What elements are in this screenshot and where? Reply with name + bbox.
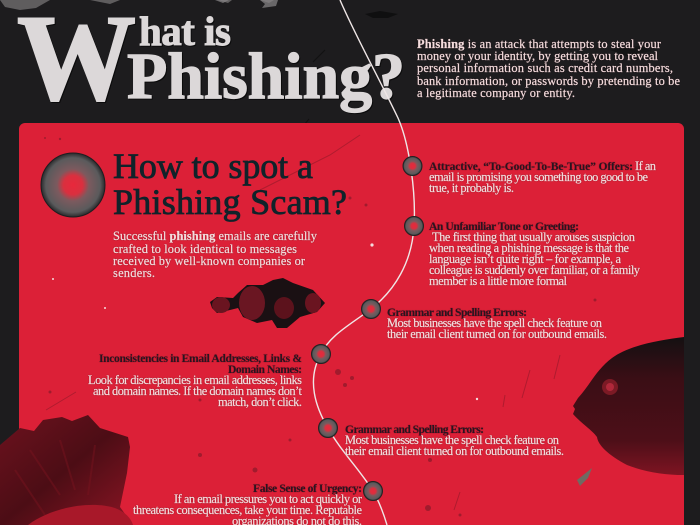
subheading paragraph: crafted to look identical to messages (113, 242, 297, 256)
item: inconsistencies: Look for discrepancies in email addresses, links (88, 373, 302, 387)
illustration: right fish (573, 337, 684, 475)
illustration: clownfish (210, 278, 325, 328)
item: attractive offers: true, it probably is. (429, 181, 514, 195)
item: unfamiliar tone: colleague is suddenly over familiar, or a family (429, 263, 641, 277)
item: false urgency (133, 482, 363, 525)
item: false urgency: False Sense of Urgency: (253, 482, 362, 495)
node 2 (404, 216, 424, 236)
item: grammar and spelling repeat: Grammar and Spelling Errors: (345, 423, 484, 436)
subheading paragraph: Successful phishing emails are carefully (113, 229, 318, 243)
item: unfamiliar tone: An Unfamiliar Tone or Greeting: (429, 220, 579, 233)
item: inconsistencies: Domain Names: (228, 363, 302, 376)
node 6 (364, 482, 382, 500)
node 3 (362, 300, 380, 318)
item: false urgency: If an email pressures you to act quickly or (174, 492, 363, 506)
item: grammar and spelling repeat: their email client turned on for outbound emails. (345, 444, 564, 458)
item: attractive offers: email is promising you something too good to be (429, 170, 648, 184)
heading: How to spot a Phishing Scam? (113, 146, 347, 222)
item: unfamiliar tone (429, 220, 641, 288)
item: attractive offers (429, 159, 656, 195)
item: inconsistencies (88, 352, 303, 409)
item: grammar and spelling: their email client turned on for outbound emails. (387, 327, 607, 341)
item: grammar and spelling (387, 306, 607, 341)
subheading paragraph: received by well-known companies or (113, 254, 306, 268)
node 1 (403, 156, 422, 176)
title: What is Phishing?: Phishing? (127, 40, 405, 113)
node 4 (312, 344, 330, 364)
illustration: left red fish fin (0, 415, 133, 525)
item: unfamiliar tone: The first thing that usually arouses suspicion (432, 230, 635, 244)
panel grunge specks (44, 135, 596, 516)
item: inconsistencies: and domain names. If the domain names don’t (93, 384, 303, 398)
heading icon: target circle (41, 153, 105, 217)
heading: How to spot a Phishing Scam?: How to spot a (113, 146, 313, 186)
intro paragraph: a legitimate company or entity. (417, 86, 575, 100)
subheading paragraph (113, 229, 318, 280)
item: grammar and spelling: Grammar and Spelling Errors: (387, 306, 527, 319)
item: false urgency: threatens consequences, take your time. Reputable (133, 503, 362, 517)
intro paragraph: bank information, or passwords by pretending to be (417, 74, 680, 88)
intro paragraph (417, 37, 680, 100)
intro paragraph: Phishing is an attack that attempts to steal your (417, 37, 662, 51)
title: What is Phishing?: hat is (139, 8, 231, 54)
fish eye (602, 379, 618, 395)
item: grammar and spelling repeat: Most businesses have the spell check feature on (345, 433, 559, 447)
heading: How to spot a Phishing Scam?: Phishing Scam? (113, 182, 347, 222)
item: unfamiliar tone: when reading a phishing message is that the (429, 241, 630, 255)
intro paragraph: personal information such as credit card numbers, (417, 61, 673, 75)
item: grammar and spelling repeat (345, 423, 564, 458)
subheading paragraph: senders. (113, 266, 155, 280)
node 5 (318, 418, 338, 438)
connector thread (313, 0, 414, 525)
title: What is Phishing? (17, 0, 405, 126)
panel: how to spot a phishing scam (19, 123, 684, 525)
item: attractive offers: If an (635, 159, 656, 173)
item: inconsistencies: match, don’t click. (218, 395, 302, 409)
item: unfamiliar tone: language isn’t quite right – for example, a (429, 252, 622, 266)
item: unfamiliar tone: member is a little more formal (429, 274, 568, 288)
item: inconsistencies: Inconsistencies in Email Addresses, Links & (99, 352, 302, 365)
item: grammar and spelling: Most businesses have the spell check feature on (387, 316, 602, 330)
item: attractive offers: Attractive, “To-Good-To-Be-True” Offers: (429, 160, 633, 173)
intro paragraph: money or your identity, by getting you to reveal (417, 49, 659, 63)
